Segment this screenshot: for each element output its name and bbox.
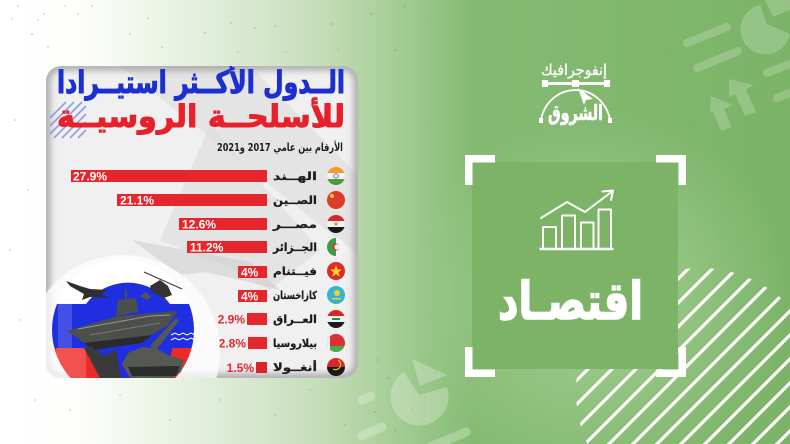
infographic thumbnail panel — [46, 66, 358, 378]
title line 1: الــدول الأكــثر استيــرادا — [57, 63, 345, 101]
icon: growth chart — [540, 190, 613, 249]
helicopter — [144, 272, 182, 298]
waves — [171, 333, 195, 340]
logo: Shorouk infographic — [539, 61, 612, 125]
row: Iraq — [218, 310, 345, 328]
row: Algeria: 11.2% — [190, 240, 224, 254]
small helicopter — [140, 292, 151, 300]
row: China — [117, 191, 345, 209]
row: Iraq: العــراق — [273, 313, 317, 326]
row: Belarus — [219, 334, 345, 352]
row: Iraq: 2.9% — [218, 312, 245, 326]
row: Algeria — [187, 238, 345, 256]
row: Kazakhstan: 4% — [241, 290, 259, 304]
logo name: الشروق — [548, 101, 603, 125]
row: Angola: 1.5% — [227, 361, 254, 375]
rear armored vehicle — [84, 346, 121, 378]
main category square — [472, 162, 678, 369]
bar chart — [71, 167, 345, 376]
row: Vietnam — [238, 262, 345, 280]
row: China: 21.1% — [120, 194, 154, 208]
logo bezier handle — [539, 80, 612, 123]
title line 2: للأسلحــة الروسيــة — [57, 97, 345, 135]
row: Algeria: الجــزائر — [272, 241, 317, 254]
diagonal white stripe pattern — [576, 268, 790, 444]
blue circle — [86, 283, 172, 378]
row: Egypt — [179, 215, 345, 233]
white halo — [46, 255, 220, 378]
aircraft carrier — [67, 289, 178, 350]
row: Belarus: 2.8% — [219, 336, 246, 350]
row: Belarus: بيلاروسيا — [273, 337, 317, 350]
row: Egypt: مصـــر — [272, 218, 317, 231]
row: Kazakhstan: كازاخستان — [273, 289, 317, 302]
fighter jet — [66, 281, 110, 300]
logo top text: إنفوجرافيك — [541, 61, 607, 79]
hatch behind title — [50, 102, 86, 138]
row: Egypt: 12.6% — [182, 218, 216, 232]
row: China: الصــين — [273, 194, 317, 207]
row: Angola — [227, 358, 345, 376]
decorative shapes: bottom left — [362, 359, 466, 444]
category title: اقتصـاد — [498, 272, 643, 332]
row: Kazakhstan — [238, 286, 345, 304]
logo cursor — [578, 88, 593, 105]
Russia circle illustration — [46, 255, 220, 378]
row: India: الهــند — [273, 170, 317, 183]
corner brackets — [465, 155, 686, 377]
flag stripes — [52, 259, 195, 304]
decorative shapes: top right — [687, 0, 790, 131]
main tank — [122, 318, 184, 378]
row: India: 27.9% — [73, 170, 107, 184]
row: India — [71, 167, 345, 185]
row: Vietnam: فيــتنام — [273, 265, 317, 278]
row: Angola: أنغــولا — [273, 360, 317, 374]
row: Vietnam: 4% — [241, 266, 259, 280]
subtitle: الأرقام بين عامي 2017 و2021 — [217, 140, 343, 154]
